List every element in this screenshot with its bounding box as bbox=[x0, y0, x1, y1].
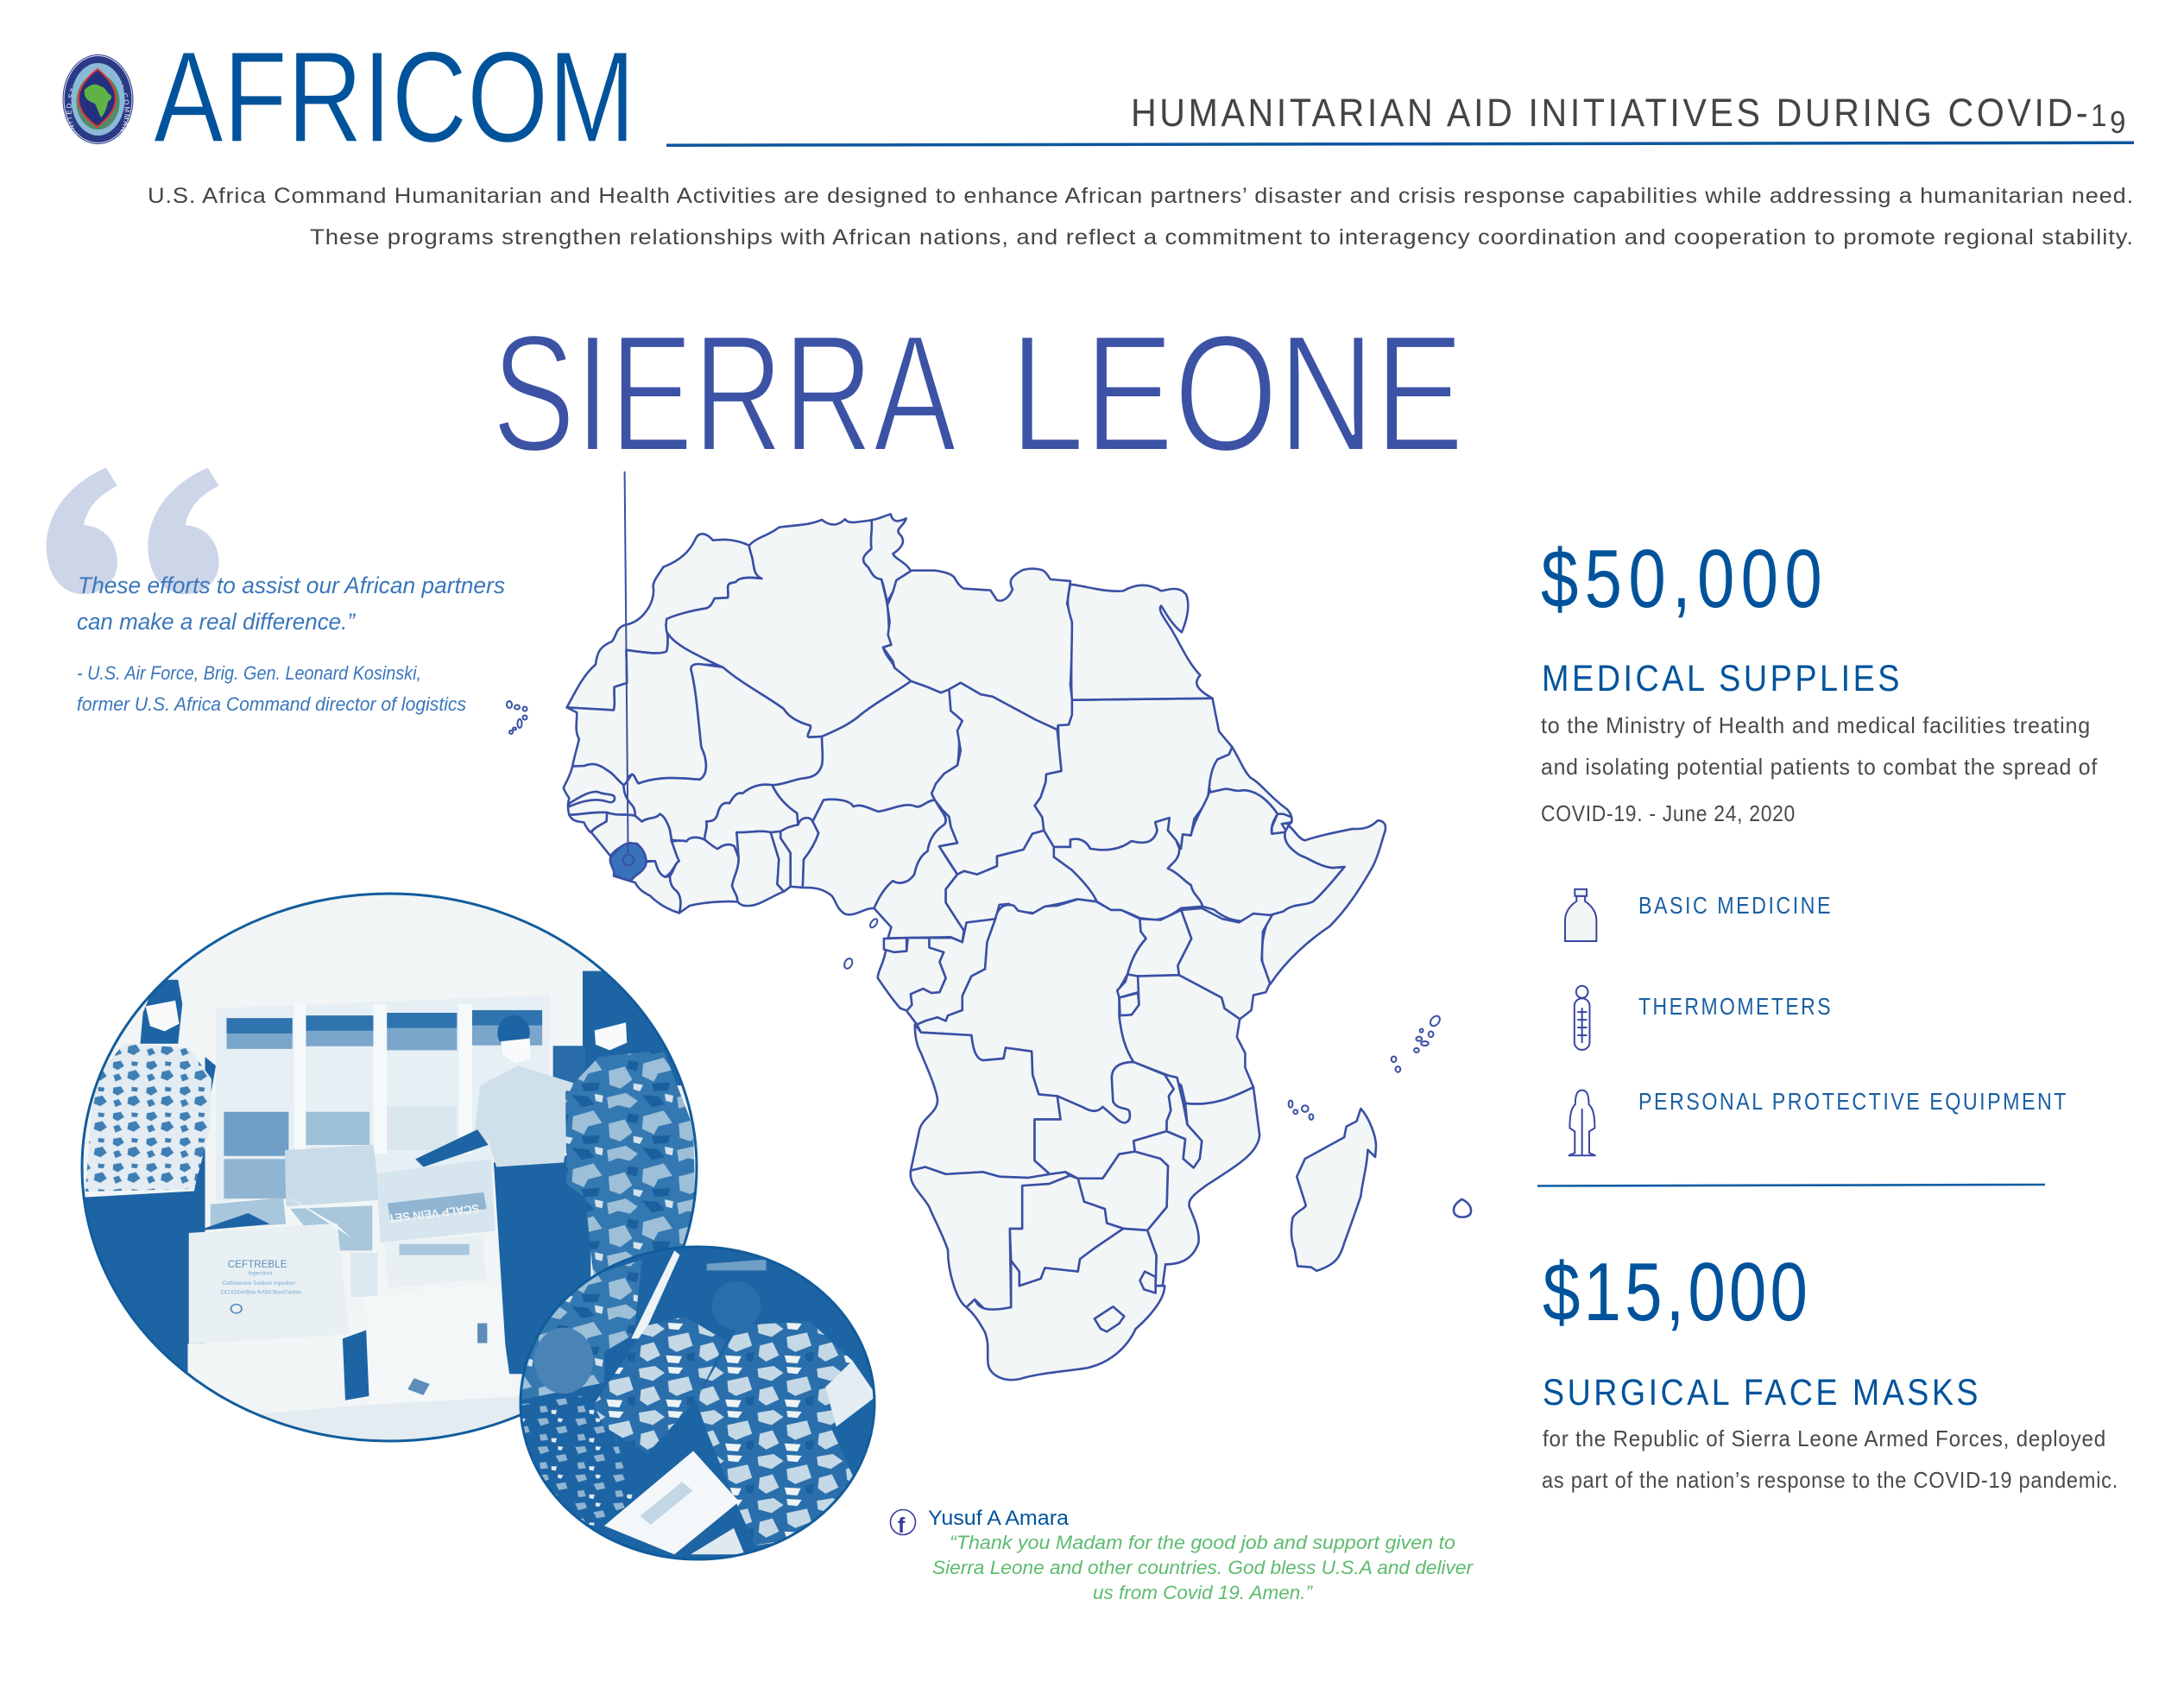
medical supplies description: and isolating potential patients to combat the spread of bbox=[1541, 754, 2098, 780]
center officer bbox=[494, 1154, 590, 1374]
quotation mark bbox=[47, 468, 219, 594]
medical supplies description: COVID-19. - June 24, 2020 bbox=[1541, 800, 1796, 826]
quote text bbox=[77, 572, 505, 715]
facebook comment quote: “Thank you Madam for the good job and support given to bbox=[950, 1532, 1455, 1553]
soldier in camouflage bbox=[565, 1050, 696, 1277]
Cape Verde islands bbox=[507, 701, 527, 734]
label: thermometers: THERMOMETERS bbox=[1638, 993, 1833, 1020]
surgical face masks description: as part of the nation’s response to the COVID-19 pandemic. bbox=[1542, 1467, 2118, 1493]
quote text: These efforts to assist our African partners bbox=[78, 572, 505, 598]
surgical face masks description bbox=[1542, 1426, 2118, 1493]
northern and western Africa bbox=[564, 514, 964, 970]
header rule bbox=[666, 142, 2134, 147]
heading: SIERRA LEONE bbox=[492, 300, 1464, 486]
photo: officials with medical supply boxes: 1X1X1Ge/Box KA50 Box/Carton bbox=[220, 1288, 301, 1295]
facebook comment quote bbox=[932, 1532, 1474, 1603]
southern Africa and islands bbox=[878, 899, 1471, 1380]
comment author: Yusuf A Amara bbox=[928, 1507, 1070, 1530]
small photo circle outline bbox=[521, 1247, 874, 1559]
left person bbox=[85, 1057, 216, 1373]
icon: medicine bottle bbox=[1565, 889, 1596, 941]
intro text: U.S. Africa Command Humanitarian and Health Activities are designed to enhance African partners’ disaster and crisis response capabilities while addressing a humanitarian need. bbox=[148, 184, 2134, 208]
subtitle: 9 bbox=[2110, 104, 2129, 140]
boxes bbox=[285, 1145, 381, 1206]
north-eastern and central Africa bbox=[883, 569, 1386, 984]
facebook comment quote: us from Covid 19. Amen.” bbox=[1093, 1582, 1314, 1603]
intro text: These programs strengthen relationships with African nations, and reflect a commitment to interagency coordination and cooperation to promote regional stability. bbox=[310, 225, 2134, 250]
photo: officials with medical supply boxes: Injection bbox=[249, 1271, 273, 1276]
photo circle outline bbox=[82, 894, 697, 1441]
quote text: former U.S. Africa Command director of logistics bbox=[77, 693, 466, 715]
medical supplies description bbox=[1541, 712, 2098, 826]
intro text bbox=[148, 184, 2134, 250]
heading: SIERRA LEONE: LEONE bbox=[1010, 300, 1464, 486]
amount: $50,000: $50,000 bbox=[1541, 533, 1828, 625]
label: personal protective equipment: PERSONAL PROTECTIVE EQUIPMENT bbox=[1638, 1088, 2068, 1115]
icon: protective suit bbox=[1569, 1091, 1595, 1155]
map of Africa bbox=[507, 514, 1471, 1380]
icon: facebook: f bbox=[898, 1514, 906, 1538]
quote text: can make a real difference.” bbox=[77, 609, 356, 635]
label: basic medicine: BASIC MEDICINE bbox=[1638, 892, 1833, 919]
pointer line and marker to Sierra Leone bbox=[623, 471, 634, 865]
icon: facebook bbox=[891, 1509, 915, 1538]
photo: soldiers receiving masks bbox=[518, 1243, 877, 1563]
medical supplies description: to the Ministry of Health and medical facilities treating bbox=[1541, 712, 2091, 738]
section divider bbox=[1537, 1185, 2045, 1186]
photo: officials with medical supply boxes: SCALP VEIN SET bbox=[388, 1201, 480, 1224]
heading: surgical face masks: SURGICAL FACE MASKS bbox=[1543, 1372, 1981, 1413]
icon: thermometer bbox=[1575, 986, 1590, 1050]
AFRICOM seal logo bbox=[62, 54, 133, 144]
amount: $15,000: $15,000 bbox=[1543, 1246, 1811, 1338]
photo: officials with medical supply boxes: Ceftriaxone Sodium Injection bbox=[223, 1280, 295, 1287]
subtitle: HUMANITARIAN AID INITIATIVES DURING COVID-1 bbox=[1131, 91, 2183, 135]
heading: SIERRA LEONE: SIERRA bbox=[492, 300, 956, 486]
photo: officials with medical supply boxes bbox=[83, 895, 696, 1440]
heading: medical supplies: MEDICAL SUPPLIES bbox=[1542, 658, 1903, 699]
quote text: - U.S. Air Force, Brig. Gen. Leonard Kosinski, bbox=[77, 662, 421, 684]
title: AFRICOM: AFRICOM bbox=[154, 24, 635, 169]
photo: officials with medical supply boxes: CEFTREBLE bbox=[228, 1258, 287, 1269]
Sierra Leone highlighted bbox=[610, 843, 647, 881]
facebook comment quote: Sierra Leone and other countries. God bless U.S.A and deliver bbox=[932, 1557, 1474, 1578]
surgical face masks description: for the Republic of Sierra Leone Armed Forces, deployed bbox=[1543, 1426, 2106, 1451]
